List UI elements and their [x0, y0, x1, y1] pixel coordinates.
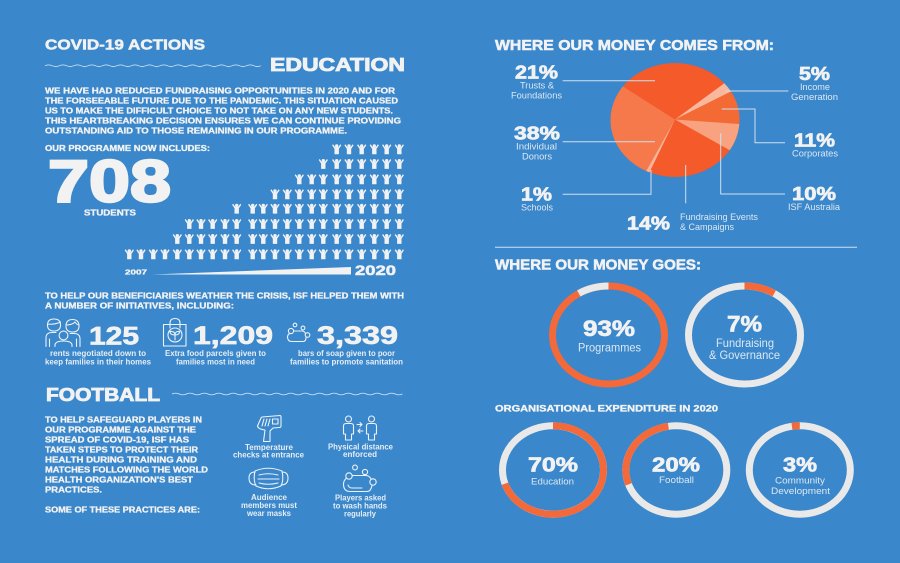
stat: food parcels: 1,209: [193, 322, 273, 350]
text block: initiatives intro: A NUMBER OF INITIATIVES, INCLUDING:: [45, 302, 234, 311]
donut: 93% programmes: 93%: [583, 316, 635, 341]
icon: face mask: [249, 468, 288, 489]
panel: education: [45, 36, 405, 367]
label: 38% individual donors: 38%: [514, 123, 560, 143]
timeline: 2007 to 2020: 2020: [355, 263, 396, 278]
panel: where our money comes from: [495, 38, 841, 233]
practice: wash hands: to wash hands: [333, 501, 387, 511]
label: 1% schools: Schools: [521, 203, 553, 214]
stat: soap bars: families to promote sanitation: [290, 357, 403, 367]
donut: 7% fundraising and governance: [688, 286, 800, 384]
stat: rents negotiated: rents negotiated down to: [50, 348, 146, 358]
label: 10% isf australia: ISF Australia: [788, 202, 841, 213]
stat: soap bars: bars of soap given to poor: [298, 348, 396, 358]
icon: two people with arrows: [344, 416, 376, 440]
donut: 3% community development: Community: [775, 475, 825, 486]
label: 5% income generation: Generation: [791, 92, 838, 103]
label: 11% corporates: [792, 131, 838, 160]
donut: 70% education: [502, 426, 604, 514]
label: 14% fundraising events: Fundraising Events: [680, 212, 758, 223]
practice: wear masks: Audience: [251, 492, 287, 502]
donut: 20% football: 20%: [652, 455, 700, 477]
stat: food parcels: families most in need: [176, 357, 255, 367]
label: 5% income generation: 5%: [799, 64, 830, 84]
label: 11% corporates: 11%: [794, 131, 835, 151]
text block: initiatives intro: [45, 292, 404, 311]
practice: temperature checks: Temperature: [245, 442, 293, 452]
title: covid-19 actions: COVID-19 ACTIONS: [45, 36, 205, 54]
text block: football intro: OUR PROGRAMME AGAINST THE: [45, 426, 197, 435]
text block: education intro: [45, 86, 401, 135]
label: 21% trusts and foundations: [511, 62, 562, 101]
practice: wear masks: wear masks: [246, 508, 291, 518]
big number: 708 students: STUDENTS: [84, 209, 137, 218]
donut: 93% programmes: [552, 286, 664, 384]
heading: education: EDUCATION: [270, 55, 405, 75]
stat: food parcels: [164, 318, 273, 367]
text block: football intro: PRACTICES.: [45, 486, 102, 495]
label: 10% isf australia: [788, 184, 841, 213]
stat: food parcels: Extra food parcels given to: [165, 348, 266, 358]
label: 38% individual donors: [514, 123, 560, 162]
heading: football: FOOTBALL: [46, 385, 160, 405]
panel: where our money goes: [495, 257, 850, 514]
leader lines: [563, 81, 788, 203]
donut: 70% education: 70%: [528, 455, 578, 477]
text block: education intro: WE HAVE HAD REDUCED FUNDRAISING OPPORTUNITIES IN 2020 AND FOR: [45, 86, 395, 95]
text block: education intro: THIS HEARTBREAKING DECISION ENSURES WE CAN CONTINUE PROVIDING: [45, 116, 401, 125]
text block: football intro: SPREAD OF COVID-19, ISF HAS: [45, 436, 190, 445]
stat: soap bars: 3,339: [317, 322, 398, 350]
donut: 20% football: [626, 426, 727, 514]
text block: football intro: [45, 416, 208, 515]
text block: football intro: TO HELP SAFEGUARD PLAYERS IN: [45, 416, 202, 425]
heading: organisational expenditure: ORGANISATIONAL EXPENDITURE IN 2020: [495, 404, 718, 415]
icon: thermometer: [258, 416, 281, 442]
icon: family: [46, 319, 80, 346]
text block: football intro: SOME OF THESE PRACTICES ARE:: [45, 506, 200, 515]
label: 11% corporates: Corporates: [792, 149, 838, 160]
panel: football: [45, 385, 402, 519]
heading: money goes: WHERE OUR MONEY GOES:: [495, 257, 701, 273]
label: 21% trusts and foundations: 21%: [515, 62, 558, 82]
stat: rents negotiated: keep families in their homes: [45, 357, 151, 367]
text block: football intro: HEALTH DURING TRAINING AND: [45, 456, 197, 465]
donut: 3% community development: Development: [771, 486, 830, 497]
practice: wear masks: members must: [241, 500, 297, 510]
big number: 708 students: 708: [48, 148, 171, 214]
icon: soap: [288, 323, 310, 342]
text block: initiatives intro: TO HELP OUR BENEFICIARIES WEATHER THE CRISIS, ISF HELPED THEM WITH: [45, 292, 404, 301]
practice: wash hands: Players asked: [335, 493, 386, 503]
practice: wash hands: regularly: [344, 509, 376, 519]
donut: 7% fundraising and governance: Fundraising: [716, 338, 774, 350]
timeline: 2007 to 2020: 2007: [125, 267, 147, 276]
donut: 3% community development: [749, 426, 850, 514]
label: 14% fundraising events: [627, 212, 758, 233]
pictogram: student growth: [125, 144, 404, 259]
text block: education intro: THE FORSEEABLE FUTURE DUE TO THE PANDEMIC. THIS SITUATION CAUSED: [45, 96, 398, 105]
stat: soap bars: [288, 322, 403, 367]
practice: physical distance: Physical distance: [328, 441, 393, 451]
practice: physical distance: [328, 416, 393, 459]
text block: football intro: TAKEN STEPS TO PROTECT THEIR: [45, 446, 198, 455]
timeline: 2007 to 2020: [125, 263, 396, 278]
icon: soap and bubbles: [344, 465, 376, 492]
practice: temperature checks: checks at entrance: [233, 450, 304, 460]
donut: 93% programmes: Programmes: [578, 343, 641, 355]
donut: 70% education: Education: [531, 476, 574, 487]
text: programme includes: OUR PROGRAMME NOW INCLUDES:: [45, 144, 210, 153]
practice: wear masks: [241, 468, 297, 518]
label: 5% income generation: [791, 64, 838, 103]
label: 5% income generation: Income: [800, 82, 830, 93]
label: 14% fundraising events: 14%: [627, 213, 670, 233]
text block: education intro: US TO MAKE THE DIFFICULT CHOICE TO NOT TAKE ON ANY NEW STUDENTS.: [45, 106, 393, 115]
text block: football intro: MATCHES FOLLOWING THE WORLD: [45, 466, 208, 475]
label: 21% trusts and foundations: Trusts &: [520, 80, 555, 91]
label: 1% schools: 1%: [521, 185, 552, 205]
stat: rents negotiated: [45, 319, 151, 367]
donut: 3% community development: 3%: [783, 455, 817, 477]
text block: education intro: OUTSTANDING AID TO THOSE REMAINING IN OUR PROGRAMME.: [45, 126, 347, 135]
donut: 7% fundraising and governance: & Governance: [709, 350, 780, 362]
heading: money comes from: WHERE OUR MONEY COMES FROM:: [495, 38, 774, 54]
donut: 20% football: Football: [659, 475, 694, 486]
text block: football intro: HEALTH ORGANIZATION'S BEST: [45, 476, 193, 485]
stat: rents negotiated: 125: [89, 322, 139, 350]
label: 38% individual donors: Donors: [522, 151, 552, 162]
label: 14% fundraising events: & Campaigns: [680, 222, 734, 233]
practice: temperature checks: [233, 416, 304, 460]
label: 21% trusts and foundations: Foundations: [511, 90, 562, 101]
icon: food bag: [164, 318, 186, 346]
pie chart: income sources: [610, 63, 740, 177]
label: 38% individual donors: Individual: [516, 141, 557, 152]
label: 10% isf australia: 10%: [792, 184, 836, 204]
donut: 7% fundraising and governance: 7%: [727, 312, 762, 337]
practice: wash hands: [333, 465, 387, 519]
label: 1% schools: [521, 185, 553, 214]
practice: physical distance: enforced: [343, 449, 377, 459]
